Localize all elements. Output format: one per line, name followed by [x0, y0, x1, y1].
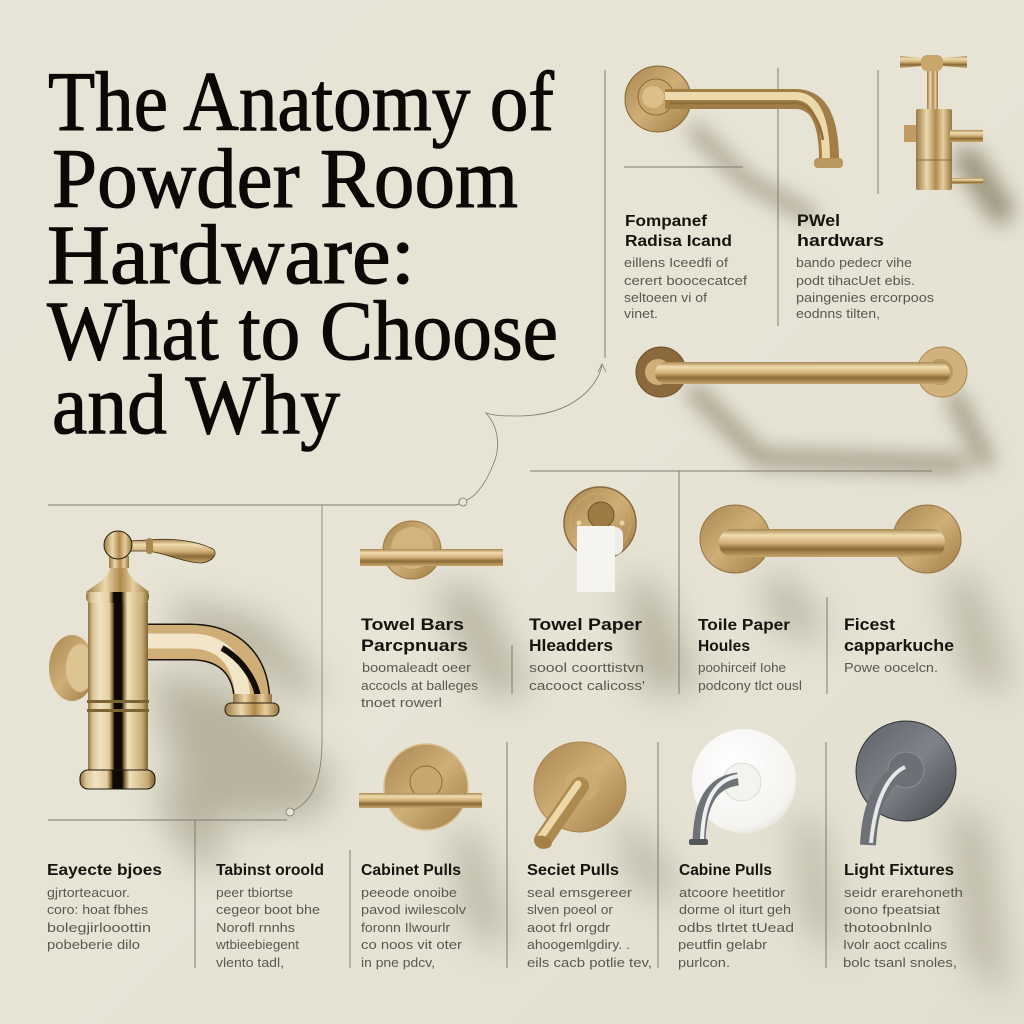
text: Light Fixtures: seidr erarehoneth [844, 885, 963, 900]
text: Tabinst oroold: vlento tadl, [216, 955, 284, 970]
text: Towel Bars [361, 616, 479, 710]
text: Cabine Pulls [678, 862, 794, 970]
soft cast shadows [150, 130, 1010, 1000]
text: Towel Paper: soool coorttistvn [529, 660, 644, 675]
text: PWel: hardwars [797, 232, 884, 250]
text: Towel Paper [529, 616, 645, 693]
text: Toile Paper: podcony tlct ousl [698, 678, 802, 693]
text: Eayecte bjoes: bolegjirlooottin [47, 920, 151, 935]
text: Toile Paper: poohirceif Iohe [698, 660, 786, 675]
title: What to Choose [47, 284, 558, 378]
text: Ficest: Powe oocelcn. [844, 660, 938, 675]
text: Light Fixtures: oono fpeatsiat [844, 902, 940, 917]
text: Fompanef: Fompanef [625, 213, 708, 230]
icon: large faucet [49, 531, 279, 789]
text: Fompanef: vinet. [624, 306, 658, 321]
text: Fompanef: Radisa Icand [625, 233, 732, 250]
text: Light Fixtures: Light Fixtures [844, 862, 954, 879]
text: Eayecte bjoes: pobeberie dilo [47, 937, 140, 952]
text: Cabine Pulls: dorme ol iturt geh [679, 902, 791, 917]
text: Cabine Pulls: odbs tlrtet tUead [678, 920, 794, 935]
text: Tabinst oroold [215, 862, 324, 970]
text: Toile Paper: Toile Paper [698, 617, 790, 634]
icon: mid towel bar [360, 521, 503, 579]
title: The Anatomy of [48, 55, 555, 149]
text: Eayecte bjoes: coro: hoat fbhes [47, 902, 149, 917]
text: Eayecte bjoes: gjrtorteacuor. [47, 885, 130, 900]
text: PWel: eodnns tilten, [796, 306, 880, 321]
text: Tabinst oroold: wtbieebiegent [215, 937, 299, 952]
text: Cabine Pulls: Cabine Pulls [679, 862, 772, 879]
text: Tabinst oroold: Tabinst oroold [216, 862, 324, 879]
text: Light Fixtures: bolc tsanl snoles, [843, 955, 957, 970]
icon: grab bar [700, 505, 961, 573]
text: PWel: podt tihacUet ebis. [796, 273, 915, 288]
icon: valve [900, 55, 983, 190]
text: Ficest: Ficest [844, 616, 896, 634]
text: Towel Bars: boomaleadt oeer [362, 660, 472, 675]
text: Fompanef: cerert boocecatcef [624, 273, 747, 288]
text: Cabinet Pulls: peeode onoibe [361, 885, 457, 900]
icon: wall spout top [625, 66, 843, 168]
icon: gold spout [532, 742, 626, 851]
text: Seciet Pulls [527, 862, 652, 970]
text: Tabinst oroold: peer tbiortse [216, 885, 293, 900]
text: Ficest [844, 616, 954, 675]
icon: white spout [689, 729, 796, 845]
text: Towel Bars: Parcpnuars [361, 637, 468, 655]
text: Towel Bars: Towel Bars [361, 616, 464, 634]
text: Towel Paper: Hleadders [529, 637, 613, 655]
text: Cabine Pulls: atcoore heetitlor [679, 885, 786, 900]
text: Light Fixtures: Ivolr aoct ccalins [843, 937, 948, 952]
text: Towel Paper: cacooct calicoss' [529, 678, 645, 693]
title: Hardware: [47, 208, 415, 302]
text: Seciet Pulls: ahoogemlgdiry. . [527, 937, 630, 952]
text: Towel Bars: accocls at balleges [361, 678, 479, 693]
text: Fompanef [624, 213, 747, 321]
text: PWel: PWel [797, 212, 840, 230]
text: Light Fixtures [843, 862, 963, 970]
connector and divider lines [48, 68, 932, 968]
icon: towel bar top [636, 347, 967, 397]
text: Cabinet Pulls: co noos vit oter [361, 937, 463, 952]
text: Eayecte bjoes [47, 862, 162, 952]
text: PWel: bando pedecr vihe [796, 255, 912, 270]
text: Fompanef: seltoeen vi of [624, 290, 707, 305]
text: Fompanef: eillens Iceedfi of [624, 255, 728, 270]
text: PWel: paingenies ercorpoos [796, 290, 935, 305]
text: Toile Paper [698, 617, 802, 693]
text: Tabinst oroold: cegeor boot bhe [216, 902, 320, 917]
text: Toile Paper: Houles [698, 638, 750, 655]
text: Cabinet Pulls: Cabinet Pulls [361, 862, 461, 879]
text: Cabinet Pulls [361, 862, 467, 970]
icon: dark spout [856, 721, 956, 845]
text: Cabinet Pulls: in pne pdcv, [361, 955, 435, 970]
title [47, 55, 558, 452]
text: Seciet Pulls: aoot frl orgdr [527, 920, 611, 935]
text: Seciet Pulls: eils cacb potlie tev, [527, 955, 652, 970]
text: Seciet Pulls: slven poeol or [527, 902, 614, 917]
text: Tabinst oroold: Norofl rnnhs [216, 920, 296, 935]
title: Powder Room [52, 132, 518, 226]
text: Seciet Pulls: seal emsgereer [527, 885, 633, 900]
title: and Why [52, 358, 340, 452]
text: Cabinet Pulls: pavod iwilescolv [361, 902, 467, 917]
icon: paper holder [564, 487, 636, 592]
text: PWel [796, 212, 935, 321]
text: Towel Bars: tnoet rowerl [361, 695, 442, 710]
text: Cabine Pulls: peutfin gelabr [678, 937, 768, 952]
text: Eayecte bjoes: Eayecte bjoes [47, 862, 162, 879]
text: Light Fixtures: thotoobnlnlo [844, 920, 932, 935]
text: Cabine Pulls: purlcon. [678, 955, 730, 970]
icon: cabinet pull [359, 744, 482, 830]
text: Seciet Pulls: Seciet Pulls [527, 862, 619, 879]
text: Cabinet Pulls: foronn Ilwourlr [361, 920, 451, 935]
text: Towel Paper: Towel Paper [529, 616, 643, 634]
text: Ficest: capparkuche [844, 637, 954, 655]
